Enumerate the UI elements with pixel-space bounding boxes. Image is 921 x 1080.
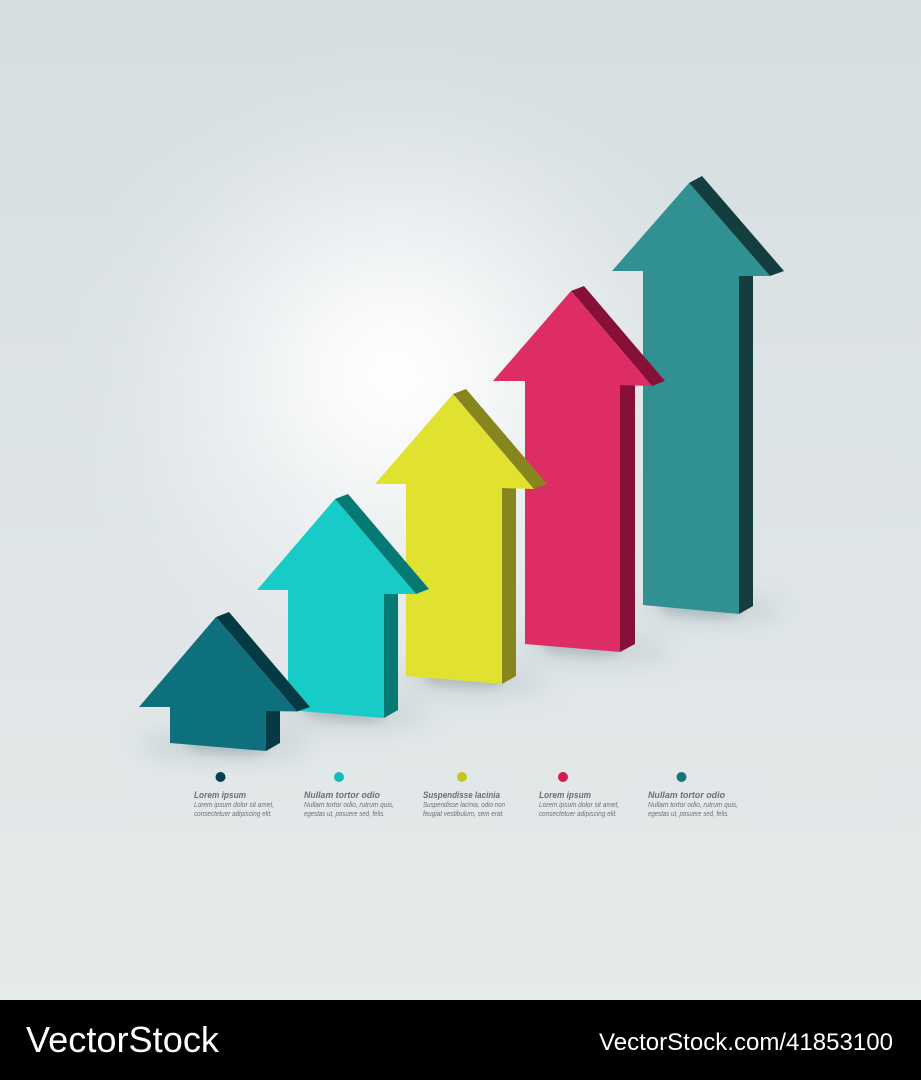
- legend item 4: [539, 772, 619, 818]
- footer bar: [0, 1000, 921, 1080]
- legend item 2: egestas ut, posuere sed, felis.: [304, 811, 385, 818]
- legend item 1: [194, 772, 274, 818]
- arrow 3: yellow: [375, 389, 547, 684]
- legend item 2: Nullam tortor odio: [304, 790, 380, 800]
- footer url text: VectorStock.com/41853100: [599, 1029, 893, 1056]
- floor shadows wide: [140, 598, 784, 759]
- legend item 3: Suspendisse lacinia: [423, 790, 500, 800]
- arrow 2: cyan: [257, 494, 429, 718]
- legend item 5: [648, 772, 738, 818]
- legend item 2: [304, 772, 394, 818]
- legend item 4: Lorem ipsum: [539, 790, 591, 800]
- arrow 5: dark teal-green, tallest: [612, 176, 784, 614]
- legend item 1: Lorem ipsum dolor sit amet,: [194, 802, 274, 809]
- legend item 3: [423, 772, 505, 818]
- floor shadows tight: [178, 597, 739, 755]
- arrow 4: crimson: [493, 286, 665, 652]
- arrow 1: dark teal, shortest: [139, 612, 310, 751]
- legend item 2: Nullam tortor odio, rutrum quis,: [304, 802, 394, 809]
- footer logo text: VectorStock: [26, 1019, 220, 1060]
- legend item 3: feugiat vestibulum, sem erat.: [423, 811, 504, 818]
- legend item 5: Nullam tortor odio, rutrum quis,: [648, 802, 738, 809]
- legend item 1: consectetuer adipiscing elit.: [194, 811, 272, 818]
- legend item 5: egestas ut, posuere sed, felis.: [648, 811, 729, 818]
- legend item 1: Lorem ipsum: [194, 790, 246, 800]
- legend item 4: consectetuer adipiscing elit.: [539, 811, 617, 818]
- legend item 4: Lorem ipsum dolor sit amet,: [539, 802, 619, 809]
- legend item 5: Nullam tortor odio: [648, 790, 725, 800]
- legend item 3: Suspendisse lacinia, odio non: [423, 802, 505, 809]
